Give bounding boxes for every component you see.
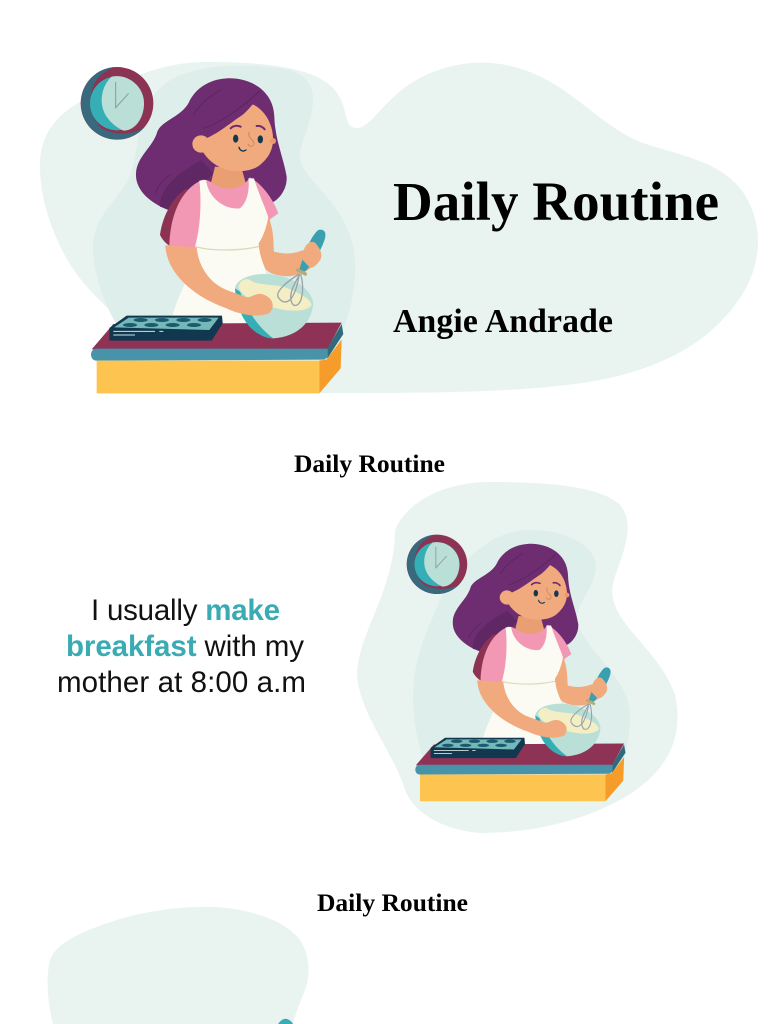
heading: slide 2: Daily Routine [294, 449, 445, 478]
author: Angie Andrade [393, 303, 613, 340]
line 1: I usually make [91, 594, 280, 627]
background inner blob: slide 2 [413, 530, 630, 800]
hair strands [155, 90, 260, 193]
illustration: girl making breakfast, small [407, 535, 625, 801]
left arm [165, 245, 273, 316]
title: Daily Routine [393, 171, 719, 232]
bowl [235, 274, 313, 338]
background blob: title slide [40, 62, 758, 393]
ears [192, 135, 210, 153]
whisk handle: slide 3 [278, 1019, 293, 1024]
line 2: breakfast with my [66, 630, 304, 663]
face [201, 104, 273, 171]
sleeve shadow [160, 189, 203, 247]
hand on whisk [303, 242, 321, 267]
line 3: mother at 8:00 a.m [57, 666, 306, 699]
hair shading [160, 160, 213, 210]
icon: wall clock [81, 67, 153, 140]
illustration: girl making breakfast [81, 67, 343, 393]
background blob: slide 3 [48, 907, 309, 1024]
background inner blob: title slide [93, 65, 355, 345]
eyes and mouth [231, 126, 265, 151]
pink shirt [169, 177, 278, 248]
counter [91, 323, 343, 393]
heading: slide 3: Daily Routine [317, 888, 468, 917]
hair [136, 78, 287, 211]
neck [211, 167, 247, 193]
whisk [278, 230, 325, 305]
muffin tray [109, 316, 223, 341]
apron [171, 178, 270, 323]
body text [57, 594, 306, 699]
background blob: slide 2 [357, 482, 678, 833]
right arm [259, 217, 312, 276]
